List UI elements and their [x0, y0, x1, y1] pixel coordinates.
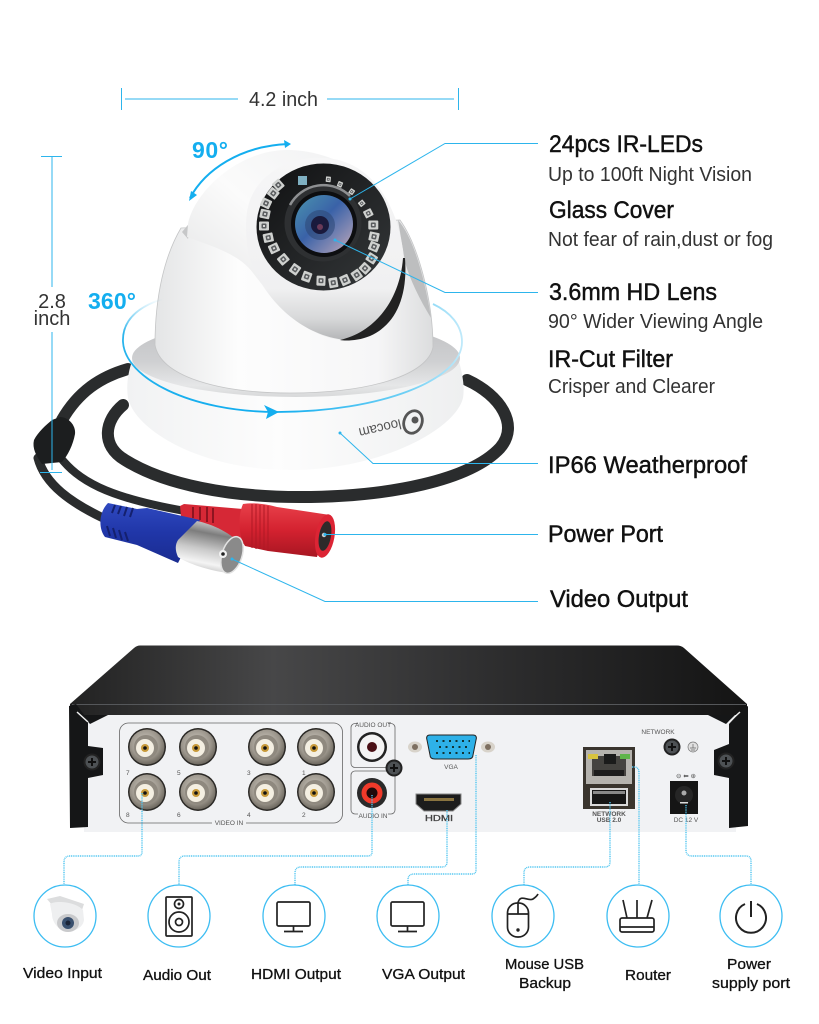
VGA port: [408, 735, 495, 771]
port labels: Audio Out: [143, 967, 212, 984]
icon: VGA monitor: [377, 885, 439, 947]
camera base flange: [132, 319, 460, 397]
feature labels: Power Port: [548, 521, 663, 548]
network and USB port: [583, 747, 635, 824]
chrome BNC head: [176, 521, 243, 573]
cable loop behind the camera: [38, 369, 508, 518]
video in panel: 8: [126, 812, 130, 819]
leader lines: [230, 144, 538, 602]
VGA port: VGA: [444, 764, 459, 771]
video in panel: 4: [247, 812, 251, 819]
collar lip left: [182, 220, 192, 239]
video in panel: [120, 723, 342, 827]
audio ports: [351, 720, 402, 820]
feature labels: 3.6mm HD Lens: [549, 279, 717, 306]
DC power port: ⊖ ⬅ ⊕: [676, 773, 697, 780]
red power plug: [180, 503, 338, 559]
360 degree rotation arrow: 360°: [88, 288, 136, 314]
audio ports: AUDIO OUT: [355, 722, 391, 729]
camera head sphere: [187, 150, 405, 340]
blue video plug: [100, 503, 247, 576]
icon: speaker audio out: [148, 885, 210, 947]
DC power port: [670, 773, 699, 824]
DC power port: DC 12 V: [674, 817, 699, 824]
audio ports: AUDIO IN: [359, 813, 388, 820]
video in panel: VIDEO IN: [215, 820, 244, 827]
corner notch left: [76, 708, 108, 724]
feature labels: Crisper and Clearer: [548, 376, 715, 398]
port labels: Mouse USB: [505, 956, 584, 973]
dimension: height 2.8 inch: inch: [34, 308, 70, 330]
icon: HDMI monitor: [263, 885, 325, 947]
DVR recorder: [69, 646, 748, 832]
HDMI port: [416, 794, 461, 823]
corner notch right: [708, 708, 742, 724]
collar inner band right: [398, 220, 431, 318]
feature labels: IP66 Weatherproof: [548, 452, 747, 479]
dotted connector lines: [64, 755, 751, 885]
DVR front panel: [84, 715, 736, 832]
feature labels: Glass Cover: [549, 197, 674, 224]
HDMI port: HDMI: [425, 814, 453, 823]
feature labels: [548, 131, 773, 613]
IR ring: [256, 164, 390, 290]
icon: video input camera: [34, 885, 96, 947]
port labels: [23, 956, 791, 992]
icon: power: [720, 885, 782, 947]
network and USB port: NETWORK: [592, 811, 626, 818]
camera base skirt: [127, 358, 464, 470]
camera dome body: [155, 220, 433, 393]
90 degree tilt arrow: [189, 137, 291, 201]
IR LED ring: [259, 176, 380, 288]
port labels: Router: [625, 967, 671, 984]
camera dome: [127, 150, 464, 470]
video in panel: 3: [247, 770, 251, 777]
DVR left bracket: [69, 704, 103, 828]
feature labels: Not fear of rain,dust or fog: [548, 229, 773, 251]
feature labels: Video Output: [550, 586, 688, 613]
video in panel: 1: [302, 770, 306, 777]
DVR right bracket: [714, 706, 748, 828]
port labels: HDMI Output: [251, 966, 342, 983]
DVR edge highlight: [72, 704, 746, 706]
feature labels: Up to 100ft Night Vision: [548, 164, 752, 186]
brand logo: loocam: [357, 416, 403, 441]
port labels: Backup: [519, 975, 571, 992]
light sensor: [298, 176, 307, 185]
cable ferrite junction: [33, 417, 75, 464]
port labels: Power: [727, 956, 771, 973]
network and USB port: USB 2.0: [597, 817, 622, 824]
port labels: supply port: [712, 975, 791, 992]
360 degree rotation arrow: [88, 288, 462, 419]
feature labels: 24pcs IR-LEDs: [549, 131, 703, 158]
video in panel: 6: [177, 812, 181, 819]
video in panel: 7: [126, 770, 130, 777]
icon: mouse: [492, 885, 554, 947]
lens: [284, 184, 362, 262]
brand logo: [357, 408, 425, 441]
dimension: width 4.2 inch: 4.2 inch: [249, 89, 318, 111]
lens bezel: [246, 158, 403, 340]
port labels: Video Input: [23, 965, 103, 982]
port labels: VGA Output: [382, 966, 466, 983]
dimension: height 2.8 inch: [34, 156, 70, 472]
90 degree tilt arrow: 90°: [192, 137, 228, 163]
dimension: height 2.8 inch: 2.8: [38, 291, 66, 313]
video in panel: 5: [177, 770, 181, 777]
video in panel: 2: [302, 812, 306, 819]
network label and ground screw: [641, 729, 698, 756]
dimension: width 4.2 inch: [122, 88, 458, 111]
network label and ground screw: NETWORK: [641, 729, 675, 736]
dark gap beneath bezel: [340, 258, 405, 341]
feature labels: 90° Wider Viewing Angle: [548, 311, 763, 333]
feature labels: IR-Cut Filter: [548, 346, 673, 373]
DVR top plate: [70, 646, 747, 715]
icon: router: [607, 885, 669, 947]
